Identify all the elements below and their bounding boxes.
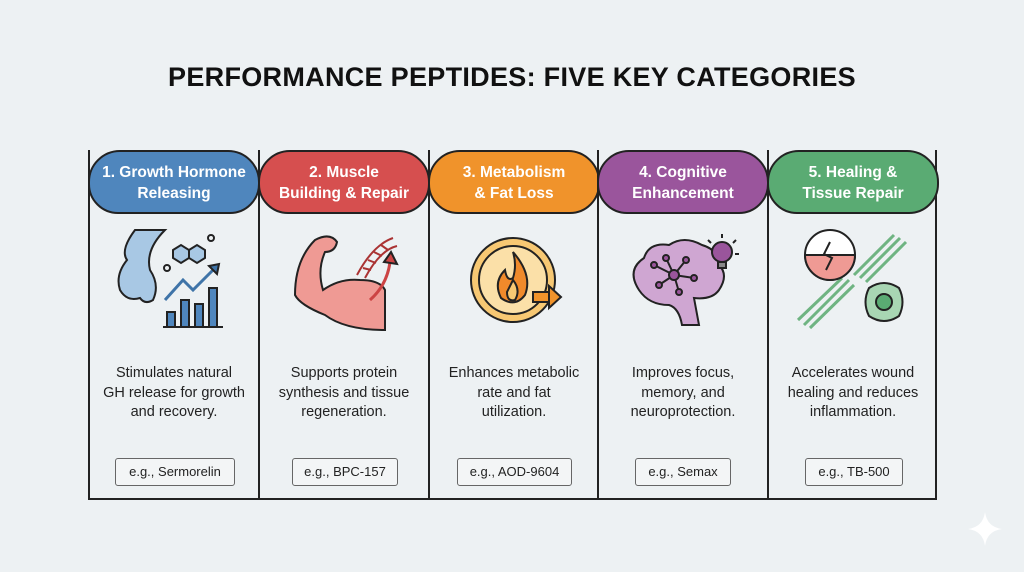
description: utilization.	[482, 404, 546, 420]
header: muscle: Building & Repair	[279, 185, 409, 202]
description: regeneration.	[301, 404, 387, 420]
example: e.g., AOD-9604	[470, 464, 559, 479]
description: rate and fat	[477, 384, 551, 400]
description: memory, and	[641, 384, 725, 400]
header: metabolism: 3. Metabolism	[463, 164, 565, 181]
description: GH release for growth	[103, 384, 245, 400]
panel: cognitive	[597, 150, 767, 500]
description: healing and reduces	[788, 384, 918, 400]
panel: metabolism	[428, 150, 598, 500]
icon: brain with bulb	[632, 234, 739, 326]
header: growth hormone: 1. Growth Hormone	[102, 164, 246, 181]
description: and recovery.	[131, 404, 217, 420]
header: cognitive	[597, 150, 769, 214]
description	[788, 365, 918, 420]
description	[279, 365, 409, 420]
header: metabolism: & Fat Loss	[474, 185, 554, 202]
icon: wound and fibers	[797, 229, 907, 329]
example	[635, 458, 731, 486]
example: e.g., Semax	[648, 464, 718, 479]
header: cognitive: 4. Cognitive	[639, 164, 727, 181]
icon: flexed arm with DNA	[294, 235, 399, 331]
description: Enhances metabolic	[449, 365, 579, 381]
example: e.g., TB-500	[818, 464, 890, 479]
header: healing: Tissue Repair	[802, 185, 904, 202]
header: growth hormone	[88, 150, 260, 214]
description: Supports protein	[291, 365, 397, 381]
example	[805, 458, 903, 486]
header: healing: 5. Healing &	[809, 164, 897, 181]
example	[292, 458, 398, 486]
title: PERFORMANCE PEPTIDES: FIVE KEY CATEGORIES	[168, 62, 856, 92]
panel: growth hormone	[88, 150, 258, 500]
header: healing	[767, 150, 939, 214]
description	[449, 365, 579, 420]
header: muscle: 2. Muscle	[309, 164, 379, 181]
header: muscle	[258, 150, 430, 214]
example: e.g., BPC-157	[304, 464, 386, 479]
panel: muscle	[258, 150, 428, 500]
description: synthesis and tissue	[279, 384, 409, 400]
description: Accelerates wound	[792, 365, 914, 381]
description: Stimulates natural	[116, 365, 232, 381]
description: inflammation.	[810, 404, 896, 420]
icon: gland and chart	[118, 229, 223, 328]
header: cognitive: Enhancement	[632, 185, 734, 202]
description	[103, 365, 245, 420]
description: Improves focus,	[632, 365, 734, 381]
header: metabolism	[428, 150, 600, 214]
description: neuroprotection.	[631, 404, 735, 420]
example	[115, 458, 235, 486]
icon: sparkle	[969, 513, 1001, 545]
header: growth hormone: Releasing	[137, 185, 211, 202]
description	[631, 365, 735, 420]
panel: healing	[767, 150, 937, 500]
icon: fat cell with flame	[470, 237, 562, 323]
example	[457, 458, 572, 486]
example: e.g., Sermorelin	[129, 464, 221, 479]
